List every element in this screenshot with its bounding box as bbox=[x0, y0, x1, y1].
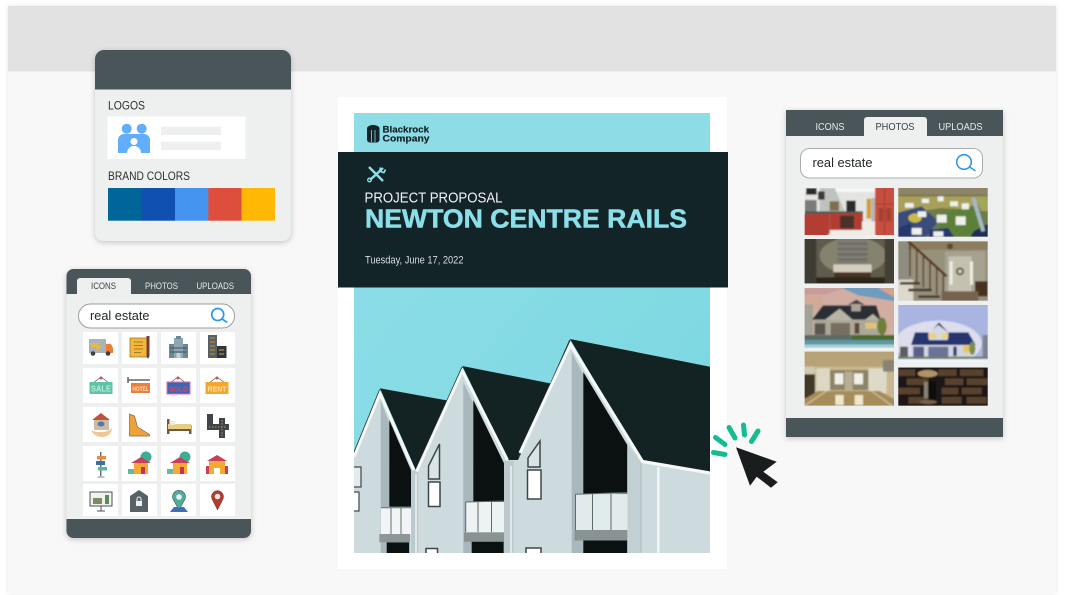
tab: photos active bbox=[864, 117, 927, 136]
icon: presentation board bbox=[90, 492, 112, 511]
search box bbox=[800, 148, 982, 178]
icon: signpost bbox=[96, 452, 107, 478]
icon: green map pin bbox=[170, 490, 188, 512]
icon: dark tower bbox=[208, 335, 226, 358]
brand panel header bbox=[95, 50, 291, 90]
photo: aerial neighbourhood bbox=[898, 188, 988, 237]
icon: mouse cursor bbox=[736, 447, 778, 488]
company logo bbox=[367, 124, 430, 145]
search box: real estate bbox=[90, 309, 150, 323]
icon: company mark bbox=[367, 125, 380, 143]
icon panel footer bbox=[66, 519, 251, 538]
panel: photo library bbox=[786, 110, 1003, 437]
icon: sale sign: SALE bbox=[91, 384, 112, 394]
top toolbar bbox=[8, 6, 1056, 72]
photo panel footer bbox=[786, 418, 1003, 437]
search box bbox=[78, 304, 234, 328]
house 1 roof bbox=[380, 388, 453, 475]
icon: red map pin bbox=[212, 491, 224, 510]
company logo: Blackrock bbox=[382, 124, 430, 135]
icon: office building bbox=[169, 336, 188, 358]
house 2 wall bbox=[418, 375, 508, 553]
icon: notebook and pen bbox=[130, 336, 150, 359]
tab: photos active: PHOTOS bbox=[876, 121, 914, 133]
icon: road junction bbox=[207, 414, 229, 438]
icon: sold sign bbox=[167, 376, 190, 394]
icon: house with percent badge bbox=[167, 452, 190, 474]
brand colors heading: BRAND COLORS bbox=[108, 171, 190, 183]
tab: icons active bbox=[77, 278, 131, 294]
panel: brand kit bbox=[95, 50, 291, 241]
title: NEWTON CENTRE RAILS bbox=[365, 206, 687, 234]
icon panel header bbox=[66, 269, 251, 294]
subtitle: PROJECT PROPOSAL bbox=[364, 190, 502, 206]
icon: rent sign: RENT bbox=[208, 384, 227, 394]
title band bbox=[338, 152, 728, 288]
photo: stone wall bathroom bbox=[804, 239, 894, 284]
tab: photos: PHOTOS bbox=[145, 281, 178, 291]
roof edge boards bbox=[354, 340, 710, 473]
icon: gated house bbox=[206, 455, 228, 474]
photo: empty tan room bbox=[804, 352, 894, 406]
icon grid bbox=[83, 332, 235, 516]
icon: house with dollar badge bbox=[128, 452, 152, 474]
photo grid bbox=[801, 185, 991, 409]
icon: sale sign bbox=[90, 376, 112, 394]
panel: icon library bbox=[66, 269, 251, 538]
photo panel header bbox=[786, 110, 1003, 136]
date: Tuesday, June 17, 2022 bbox=[365, 254, 464, 266]
photo: red kitchen bbox=[804, 188, 894, 235]
icon: people logo bbox=[118, 124, 150, 153]
photo: house at sunset bbox=[804, 288, 894, 348]
icon: hotel sign bbox=[128, 377, 150, 393]
tab: uploads: UPLOADS bbox=[196, 281, 234, 291]
icon: magnifier bbox=[957, 155, 975, 170]
cover photo: row of houses bbox=[350, 339, 710, 556]
icon: magnifier bbox=[212, 308, 227, 322]
icon: rent sign bbox=[206, 376, 228, 394]
brand color swatches bbox=[108, 188, 275, 221]
icon: house in hand bbox=[91, 413, 112, 437]
company logo: Company bbox=[382, 134, 430, 145]
icon: tools bbox=[368, 167, 386, 182]
house 1 wall bbox=[354, 396, 414, 553]
icon: delivery truck bbox=[89, 339, 113, 356]
teal logo background bbox=[354, 113, 710, 152]
panel: project proposal poster bbox=[338, 97, 728, 569]
photo: dark brick wall bbox=[898, 368, 988, 406]
tab: icons active: ICONS bbox=[91, 281, 116, 291]
icon: bed bbox=[167, 419, 192, 434]
photo: blue house bbox=[898, 305, 988, 364]
photo: staircase hallway bbox=[898, 241, 988, 301]
icon: click sparks bbox=[714, 425, 758, 454]
house 3 roof bbox=[570, 339, 710, 472]
icon: set square ruler bbox=[130, 414, 150, 436]
tab: uploads: UPLOADS bbox=[938, 121, 982, 133]
house 3 wall bbox=[505, 348, 710, 553]
house 2 roof bbox=[462, 366, 556, 466]
tab: icons: ICONS bbox=[816, 121, 844, 133]
logo card bbox=[108, 116, 246, 159]
icon: house with lock bbox=[130, 490, 148, 512]
search box: real estate bbox=[812, 155, 872, 170]
icon: sold sign: SOLD bbox=[169, 384, 189, 394]
logos heading: LOGOS bbox=[108, 100, 145, 112]
icon: hotel sign: HOTEL bbox=[132, 386, 149, 393]
